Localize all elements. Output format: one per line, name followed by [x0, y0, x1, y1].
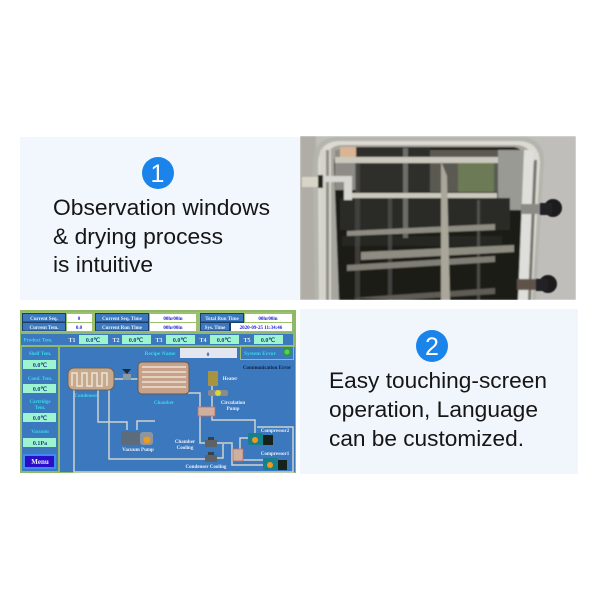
icon: number 1 badge — [142, 157, 174, 189]
product temperature row: T1 — [68, 338, 76, 344]
chamber — [138, 362, 189, 406]
side panel: temperature and vacuum readouts: 0.0℃ — [33, 415, 47, 422]
compressor 2 — [248, 429, 290, 445]
vacuum pump — [121, 431, 154, 453]
side panel: temperature and vacuum readouts — [22, 347, 58, 471]
condenser — [68, 368, 114, 399]
panel: observation windows text — [20, 137, 300, 300]
recipe name field and system error indicator: Communication Error — [243, 366, 292, 371]
chamber and condenser cooling valves: Chamber — [175, 440, 196, 445]
header status fields: 0 — [78, 317, 81, 322]
vertical strap — [441, 161, 450, 300]
compressor 2: Compressor2 — [261, 429, 290, 434]
text block: touch screen description: can be customized. — [329, 426, 524, 451]
recipe name field and system error indicator: Recipe Name — [144, 351, 176, 357]
condenser: Condenser — [74, 394, 98, 399]
header status fields: Current Seq. — [30, 317, 59, 322]
panel: touch screen text — [300, 309, 578, 474]
header status fields: Total Run Time — [205, 317, 240, 322]
heat exchanger — [198, 407, 215, 416]
side panel: temperature and vacuum readouts: 0.0℃ — [33, 386, 47, 393]
chamber and condenser cooling valves — [175, 437, 227, 470]
icon: number 1 badge: 1 — [151, 160, 164, 188]
menu button: Menu — [31, 458, 49, 466]
product temperature row: 0.0℃ — [217, 337, 231, 344]
header status fields: Current Seq. Time — [102, 317, 143, 322]
text block: observation description: Observation windows — [53, 195, 270, 220]
header status fields: 00hr00in — [258, 317, 278, 322]
process pipework — [74, 379, 293, 472]
compressor 1 — [261, 452, 290, 470]
text block: touch screen description: Easy touching-screen — [329, 368, 547, 393]
recipe name field and system error indicator: System Error — [244, 351, 276, 357]
product temperature row — [21, 334, 293, 345]
text block: observation description: is intuitive — [53, 252, 153, 277]
text block: touch screen description: operation, Language — [329, 397, 538, 422]
icon: number 2 badge: 2 — [425, 333, 439, 361]
chamber and condenser cooling valves: Cooling — [177, 446, 194, 451]
heater — [208, 371, 238, 386]
product temperature row: T5 — [243, 338, 251, 344]
left latch — [302, 177, 322, 187]
circulation pump — [208, 390, 245, 412]
second heat exchanger — [233, 449, 243, 461]
text block: touch screen description — [329, 368, 547, 451]
product temperature row: 0.0℃ — [129, 337, 143, 344]
shelves — [335, 157, 498, 163]
circulation pump: Circulation — [221, 401, 245, 406]
side panel: temperature and vacuum readouts: Tem. — [35, 406, 46, 411]
chamber: Chamber — [154, 401, 175, 406]
window frame — [313, 137, 544, 300]
icon: number 2 badge — [416, 330, 448, 362]
heater: Heater — [223, 377, 238, 382]
side panel: temperature and vacuum readouts: 0.1Pa — [33, 441, 47, 447]
text block: observation description: & drying process — [53, 224, 223, 249]
header status fields: Sys. Time — [205, 326, 226, 331]
dark chamber — [334, 147, 525, 300]
vacuum pump: Vacuum Pump — [122, 448, 154, 453]
header status fields: Current Run Time — [102, 326, 143, 331]
product temperature row: T4 — [199, 338, 207, 344]
product temperature row: 0.0℃ — [86, 337, 100, 344]
product temperature row: Product Tem. — [24, 338, 53, 344]
header status fields: 00hr00in — [163, 317, 183, 322]
product temperature row: T3 — [155, 338, 163, 344]
side panel: temperature and vacuum readouts: Vacuum — [31, 430, 50, 435]
side panel: temperature and vacuum readouts: Cond. Tem. — [28, 377, 53, 382]
side panel: temperature and vacuum readouts: Shelf Tem. — [29, 352, 52, 357]
header status fields — [22, 312, 292, 332]
circulation pump: Pump — [227, 407, 240, 412]
side panel: temperature and vacuum readouts: Cartridge — [29, 400, 51, 405]
compressor 1: Compressor1 — [261, 452, 290, 457]
text block: observation description — [53, 195, 270, 277]
header status fields: 00hr00in — [163, 326, 183, 331]
product temperature row: T2 — [112, 338, 120, 344]
header status fields: 2020-09-25 11:34:46 — [240, 326, 283, 331]
clip on upper shelves — [322, 176, 352, 200]
product temperature row: 0.0℃ — [173, 337, 187, 344]
product temperature row: 0.0℃ — [261, 337, 275, 344]
side panel: temperature and vacuum readouts: 0.0℃ — [33, 362, 47, 369]
header status fields: Current Tem. — [29, 326, 59, 331]
header status fields: 0.0 — [76, 326, 83, 331]
photo: freeze dryer observation window — [300, 136, 576, 300]
recipe name field and system error indicator — [144, 346, 294, 371]
touch screen control interface — [20, 310, 296, 473]
right latches — [521, 204, 547, 214]
chamber and condenser cooling valves: Condenser Cooling — [186, 465, 227, 470]
recipe name field and system error indicator: 0 — [207, 352, 210, 358]
valve — [122, 369, 131, 380]
